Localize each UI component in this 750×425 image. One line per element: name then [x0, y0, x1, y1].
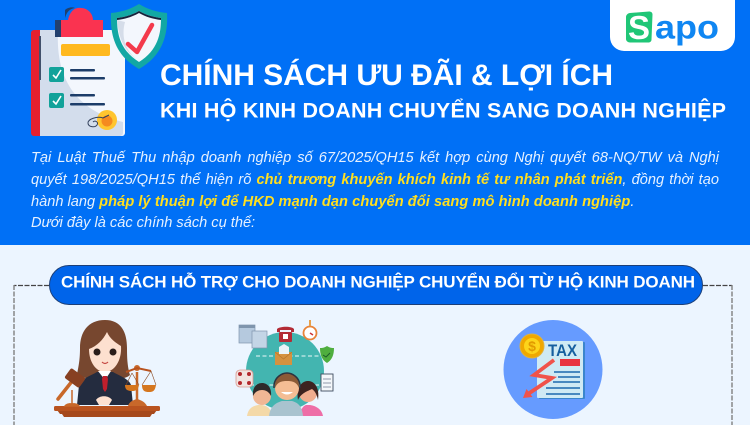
section heading pill [49, 265, 703, 305]
title [160, 58, 726, 122]
icon: tax reduction document: TAX [548, 341, 578, 360]
logo: Sapo [610, 0, 735, 51]
header band [0, 0, 750, 245]
icon: tax reduction document: $ [528, 338, 536, 354]
intro text block: hành lang pháp lý thuận lợi để HKD mạnh dạn chuyển đổi sang mô hình doanh nghiệp. [31, 194, 634, 210]
section heading pill: CHÍNH SÁCH HỖ TRỢ CHO DOANH NGHIỆP CHUYỂN ĐỔI TỪ HỘ KINH DOANH [61, 272, 695, 292]
logo: Sapo: S [628, 9, 650, 46]
title line 1: CHÍNH SÁCH ƯU ĐÃI & LỢI ÍCH [160, 58, 613, 92]
intro text block [31, 150, 720, 231]
intro text block: Tại Luật Thuế Thu nhập doanh nghiệp số 67/2025/QH15 kết hợp cùng Nghị quyết 68-NQ/TW và Nghị [31, 150, 719, 166]
title line 2: KHI HỘ KINH DOANH CHUYỂN SANG DOANH NGHIỆP [160, 98, 726, 122]
icon: clipboard checklist [31, 7, 125, 136]
icon: shield with check mark [110, 4, 168, 69]
intro text block: quyết 198/2025/QH15 thể hiện rõ chủ trương khuyến khích kinh tế tư nhân phát triển, đồng thời tạo [31, 172, 719, 188]
intro text block: Dưới đây là các chính sách cụ thể: [31, 215, 255, 231]
logo: Sapo: apo [655, 8, 719, 46]
